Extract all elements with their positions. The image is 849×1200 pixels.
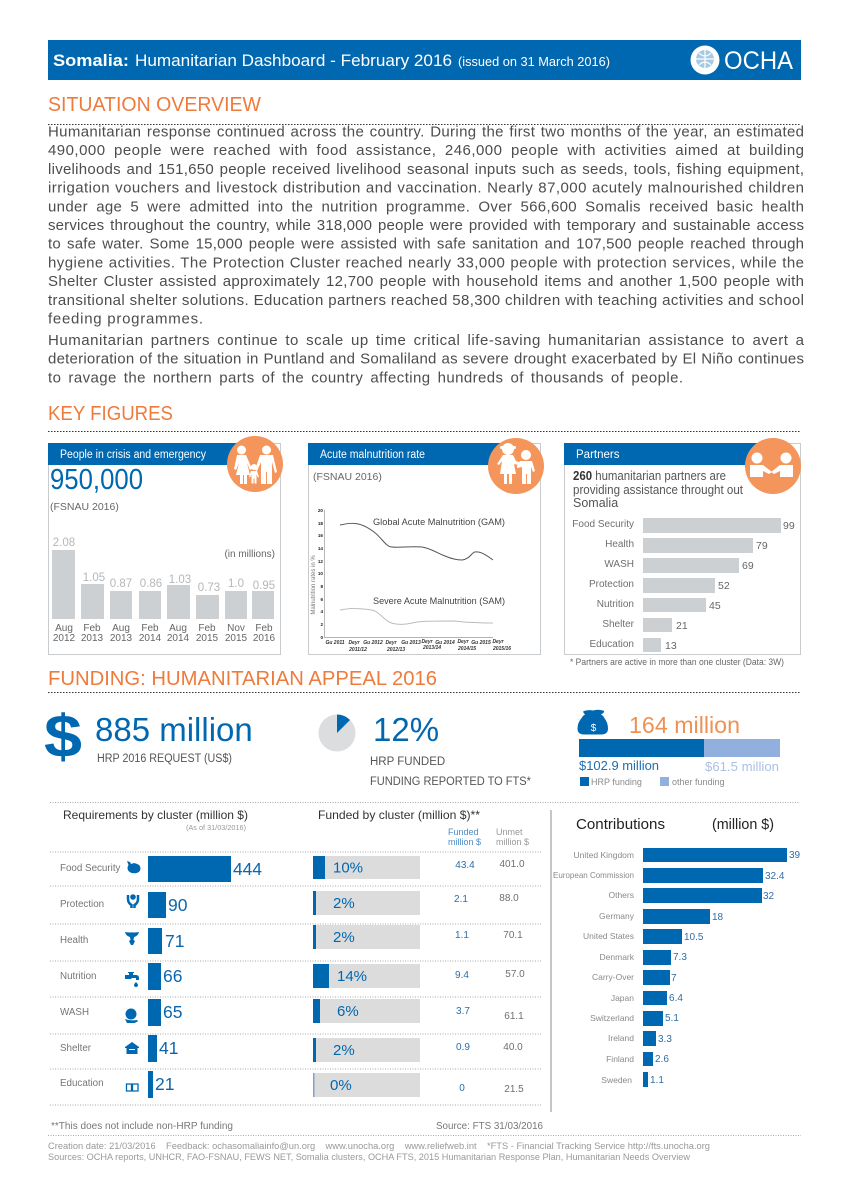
- cluster row: nutrition: Nutrition: [60, 971, 96, 982]
- header banner: [48, 40, 801, 80]
- bar chart: people in crisis: Aug: [112, 623, 130, 634]
- text block: situation overview: Humanitarian response continued across the country. During the first two months of the year, an estimated: [48, 124, 804, 140]
- bar chart: partners by cluster: 13: [665, 640, 677, 652]
- text block: situation overview: under age 5 were admitted into the nutrition programme. Over 566,600 Somalis received basic health: [48, 198, 804, 215]
- icon: dollar sign: $: [44, 703, 82, 770]
- panel: people in crisis and emergency: [48, 436, 283, 654]
- line chart: malnutrition: 12: [318, 559, 323, 564]
- icon: education book: [126, 1084, 138, 1091]
- line chart: malnutrition: 2012/13: [386, 647, 405, 653]
- line chart: malnutrition: 0: [320, 635, 323, 640]
- bar chart: people in crisis: Nov: [227, 623, 245, 634]
- legend: funding: other funding: [672, 777, 725, 787]
- bar chart: people in crisis: 2013: [110, 633, 133, 644]
- text block: situation overview: to ravage the northern parts of the country affecting hundreds of thousands of people.: [48, 369, 683, 386]
- panel: partners: Partners: [576, 449, 620, 461]
- column heading: funded: [448, 827, 481, 847]
- text block: situation overview: services throughout the country, while 318,000 people were provided with temporary and sustainable access: [48, 217, 804, 234]
- bar chart: people in crisis: 0.87: [110, 578, 132, 590]
- header banner: Humanitarian Dashboard - February 2016: [135, 52, 452, 70]
- header banner: (issued on 31 March 2016): [458, 55, 610, 69]
- column heading: funded: Funded: [448, 827, 479, 837]
- note: unit: (in millions): [224, 549, 275, 560]
- cluster row: protection: [60, 891, 519, 918]
- footer text: Creation date: 21/03/2016 Feedback: ochasomaliainfo@un.org www.unocha.org www.reliefweb.int *FTS - Financial Tracking Service http://fts.unocha.org: [48, 1141, 710, 1152]
- cluster row: shelter: 41: [159, 1038, 178, 1058]
- bar chart: contributions: 10.5: [684, 932, 704, 943]
- line chart: malnutrition: Deyr: [492, 639, 505, 645]
- cluster row: education: 0%: [330, 1077, 352, 1094]
- bar chart: people in crisis: 2016: [253, 633, 276, 644]
- bar chart: people in crisis: 2015: [196, 633, 219, 644]
- bar chart: contributions: Carry-Over: [592, 972, 634, 982]
- bar chart: contributions: Germany: [599, 911, 635, 921]
- line chart: malnutrition: Deyr: [348, 640, 361, 646]
- key figure: request: HRP 2016 REQUEST (US$): [97, 753, 232, 765]
- line chart: malnutrition: 2013/14: [422, 645, 441, 651]
- bar chart: contributions: Finland: [606, 1054, 634, 1064]
- cluster row: wash: [60, 999, 524, 1026]
- heading: requirements: [63, 808, 248, 832]
- bar chart: contributions: Japan: [611, 993, 634, 1003]
- cluster row: food security: 43.4: [455, 860, 475, 871]
- bar chart: partners by cluster: 45: [709, 600, 721, 612]
- cluster row: nutrition: 14%: [337, 968, 367, 985]
- line chart: malnutrition: 20: [318, 508, 323, 513]
- icon: health: [125, 932, 139, 945]
- bar chart: partners by cluster: Health: [605, 539, 634, 550]
- cluster row: education: 0: [459, 1083, 465, 1094]
- cluster row: food security: 444: [233, 859, 262, 879]
- line chart: malnutrition: Gu 2015: [471, 640, 491, 646]
- icon: nutrition tap: [125, 972, 139, 987]
- key number: 950,000: [50, 464, 143, 496]
- panel: acute malnutrition rate: Acute malnutrition rate: [320, 449, 425, 461]
- line chart: malnutrition: 6: [320, 597, 323, 602]
- bar chart: contributions: Sweden: [601, 1075, 632, 1085]
- bar chart: partners by cluster: Shelter: [602, 619, 635, 630]
- text block: situation overview: deterioration of the situation in Puntland and Somaliland as severe drought exacerbated by El Niño continues: [48, 351, 804, 368]
- text: partners summary: Somalia: [573, 496, 618, 510]
- cluster row: protection: 2%: [333, 895, 355, 912]
- line chart: malnutrition: Deyr: [385, 640, 398, 646]
- line chart: malnutrition: Deyr: [457, 639, 470, 645]
- cluster row: shelter: 2%: [333, 1042, 355, 1059]
- footnote: partners: * Partners are active in more than one cluster (Data: 3W): [570, 657, 784, 667]
- cluster row: health: 1.1: [455, 930, 469, 941]
- bar chart: contributions: 32: [763, 891, 775, 902]
- key figure: total funding: 164 million: [629, 712, 740, 738]
- line chart: malnutrition: Gu 2014: [435, 640, 455, 646]
- line chart: malnutrition: 18: [318, 521, 323, 526]
- cluster row: food security: 10%: [333, 860, 363, 876]
- bar chart: contributions: United States: [583, 931, 634, 941]
- panel: acute malnutrition rate: [308, 438, 544, 654]
- line chart: malnutrition: Malnutrition rates in %: [311, 555, 317, 615]
- cluster row: wash: 61.1: [504, 1011, 524, 1022]
- line chart: malnutrition: Deyr: [421, 639, 434, 645]
- cluster row: food security: Food Security: [60, 863, 121, 874]
- heading: key figures: KEY FIGURES: [48, 403, 173, 425]
- bar chart: partners by cluster: 79: [756, 540, 768, 552]
- bar chart: partners by cluster: Nutrition: [597, 599, 634, 610]
- divider: vertical: [550, 810, 552, 1112]
- bar chart: people in crisis: 0.86: [140, 578, 162, 590]
- bar chart: contributions: [553, 848, 801, 1087]
- line chart: malnutrition: 2011/12: [348, 647, 367, 653]
- line chart: malnutrition: 4: [320, 609, 323, 614]
- icon: money bag: [578, 710, 608, 734]
- line chart: malnutrition: Global Acute Malnutrition (GAM): [373, 517, 505, 528]
- bar chart: contributions: 32.4: [765, 871, 785, 882]
- text: partners summary: providing assistance throught out: [573, 483, 743, 497]
- pie chart: funded share: [318, 714, 356, 752]
- bar chart: people in crisis: Feb: [141, 623, 159, 634]
- line chart: malnutrition: [311, 508, 511, 653]
- key figure: request: [95, 711, 253, 765]
- bar chart: people in crisis: Aug: [169, 623, 187, 634]
- bar chart: contributions: 3.3: [658, 1034, 672, 1045]
- footer text: [48, 1141, 710, 1163]
- heading: requirements: Requirements by cluster (million $): [63, 808, 248, 822]
- header banner: Somalia:: [53, 51, 129, 70]
- heading: contributions: [576, 817, 774, 833]
- bar chart: contributions: 1.1: [650, 1075, 664, 1086]
- heading: requirements: (As of 31/03/2016): [186, 825, 246, 832]
- bar chart: people in crisis: Feb: [83, 623, 101, 634]
- bar chart: contributions: 2.6: [655, 1054, 669, 1065]
- bar chart: people in crisis: 0.73: [198, 582, 220, 594]
- icon: UN emblem: [690, 46, 720, 74]
- cluster row: shelter: Shelter: [60, 1043, 92, 1054]
- bar chart: people in crisis: 2014: [167, 633, 190, 644]
- cluster row: nutrition: 9.4: [455, 970, 469, 981]
- cluster row: shelter: [60, 1035, 523, 1062]
- source: (FSNAU 2016): [313, 471, 382, 483]
- stacked bar: funding split: $61.5 million: [705, 759, 779, 774]
- text block: situation overview: to safe water. Some 15,000 people were assisted with safe sanitation and 107,500 people reached through: [48, 236, 804, 253]
- legend: funding: [580, 777, 725, 787]
- bar chart: partners by cluster: [572, 518, 795, 652]
- cluster row: shelter: 40.0: [503, 1042, 523, 1053]
- heading: contributions: (million $): [712, 817, 774, 833]
- bar chart: partners by cluster: 21: [676, 620, 688, 632]
- text block: situation overview: transitional shelter solutions. Education partners reached 58,300 children with teaching activities and school: [48, 292, 804, 309]
- bar chart: partners by cluster: 69: [742, 560, 754, 572]
- column heading: unmet: Unmet: [496, 827, 523, 837]
- cluster row: food security: [60, 856, 525, 882]
- bar chart: contributions: United Kingdom: [574, 850, 634, 860]
- line chart: malnutrition: 10: [318, 571, 323, 576]
- bar chart: people in crisis: Aug: [55, 623, 73, 634]
- cluster row: health: Health: [60, 935, 88, 946]
- bar chart: people in crisis: Feb: [255, 623, 273, 634]
- panel: people in crisis and emergency: People in crisis and emergency: [60, 449, 206, 461]
- legend: funding: HRP funding: [591, 777, 642, 787]
- text block: situation overview: hygiene activities. The Protection Cluster reached nearly 33,000 people with protection services, while the: [48, 254, 804, 271]
- key figure: funded: [370, 711, 531, 788]
- cluster row: wash: 6%: [337, 1003, 359, 1020]
- cluster row: health: 70.1: [503, 930, 523, 941]
- cluster row: health: [60, 925, 523, 954]
- cluster row: nutrition: 66: [163, 966, 182, 986]
- panel: partners: [564, 438, 801, 654]
- cluster row: wash: WASH: [60, 1007, 89, 1018]
- bar chart: people in crisis: Feb: [198, 623, 216, 634]
- bar chart: people in crisis: [52, 537, 276, 644]
- column heading: funded: million $: [448, 837, 481, 847]
- bar chart: partners by cluster: WASH: [604, 559, 634, 570]
- bar chart: partners by cluster: Protection: [589, 579, 634, 590]
- cluster row: health: 2%: [333, 929, 355, 946]
- cluster row: education: Education: [60, 1078, 104, 1089]
- icon: money bag: $: [591, 723, 597, 734]
- cluster row: protection: 2.1: [454, 894, 468, 905]
- bar chart: contributions: 6.4: [669, 993, 683, 1004]
- cluster row: protection: Protection: [60, 899, 104, 910]
- bar chart: contributions: Switzerland: [590, 1013, 634, 1023]
- bar chart: people in crisis: 2014: [139, 633, 162, 644]
- line chart: malnutrition: Severe Acute Malnutrition (SAM): [373, 596, 505, 607]
- bar chart: partners by cluster: Education: [590, 639, 634, 650]
- icon: wash: [125, 1008, 138, 1023]
- text block: situation overview: 490,000 people were reached with food assistance, 246,000 people with activities aimed at building: [48, 142, 804, 159]
- icon: handshake: [745, 438, 801, 494]
- icon: food: [127, 861, 140, 873]
- line chart: malnutrition: 14: [318, 546, 323, 551]
- key figure: funded: FUNDING REPORTED TO FTS*: [370, 776, 531, 788]
- line chart: malnutrition: Gu 2013: [401, 640, 421, 646]
- bar chart: contributions: 7: [671, 973, 677, 984]
- bar chart: people in crisis: 2015: [225, 633, 248, 644]
- stacked bar: funding split: [579, 739, 780, 774]
- icon: children: [488, 438, 544, 494]
- text block: situation overview: livelihoods and 151,650 people received livelihood seasonal inputs such as seeds, tools, fishing equipment,: [48, 161, 804, 178]
- line chart: malnutrition: 8: [320, 584, 323, 589]
- bar chart: partners by cluster: 52: [718, 580, 730, 592]
- bar chart: people in crisis: 2012: [53, 633, 76, 644]
- cluster row: education: 21.5: [504, 1084, 524, 1095]
- bar chart: contributions: European Commission: [553, 870, 634, 880]
- bar chart: partners by cluster: 99: [783, 520, 795, 532]
- bar chart: partners by cluster: Food Security: [572, 519, 634, 530]
- bar chart: contributions: Denmark: [600, 952, 635, 962]
- line chart: malnutrition: 16: [318, 533, 323, 538]
- bar chart: people in crisis: 1.0: [228, 578, 244, 590]
- bar chart: people in crisis: 2013: [81, 633, 104, 644]
- icon: family: [227, 436, 283, 492]
- icon: shelter: [125, 1042, 139, 1054]
- key figure: request: 885 million: [95, 711, 253, 748]
- icon: protection: [128, 894, 138, 908]
- bar chart: people in crisis: 2.08: [53, 537, 75, 549]
- text: partners summary: [573, 469, 743, 510]
- stacked bar: funding split: $102.9 million: [579, 758, 659, 773]
- heading: funded: Funded by cluster (million $)**: [318, 808, 480, 822]
- footer text: Sources: OCHA reports, UNHCR, FAO-FSNAU, FEWS NET, Somalia clusters, OCHA FTS, 2015 Humanitarian Response Plan, Humanitarian Needs Overview: [48, 1152, 690, 1163]
- text block: situation overview: feeding programmes.: [48, 310, 203, 328]
- bar chart: contributions: 7.3: [673, 952, 687, 963]
- bar chart: contributions: 39: [789, 850, 801, 861]
- source: (FSNAU 2016): [50, 501, 119, 513]
- text: partners summary: 260 humanitarian partners are: [573, 469, 726, 483]
- source: FTS: Source: FTS 31/03/2016: [436, 1121, 543, 1132]
- cluster row: shelter: 0.9: [456, 1042, 470, 1053]
- heading: contributions: Contributions: [576, 817, 665, 833]
- bar chart: contributions: 5.1: [665, 1013, 679, 1024]
- footnote: non-HRP funding: **This does not include non-HRP funding: [51, 1121, 233, 1132]
- cluster row: food security: 401.0: [499, 859, 525, 870]
- column heading: unmet: [496, 827, 529, 847]
- bar chart: contributions: 18: [712, 912, 724, 923]
- bar chart: people in crisis: 1.03: [169, 574, 191, 586]
- text block: situation overview: Humanitarian partners continue to scale up time critical life-saving humanitarian assistance to avert a: [48, 332, 805, 349]
- cluster row: nutrition: 57.0: [505, 969, 525, 980]
- key figure: funded: HRP FUNDED: [370, 756, 445, 768]
- header banner: OCHA: [724, 47, 793, 75]
- cluster row: education: [60, 1071, 524, 1098]
- line chart: malnutrition: 2015/16: [492, 646, 511, 652]
- text block: situation overview: [48, 124, 805, 386]
- cluster row: protection: 88.0: [499, 893, 519, 904]
- heading: funding: FUNDING: HUMANITARIAN APPEAL 2016: [48, 668, 437, 690]
- line chart: malnutrition: 2014/15: [457, 646, 476, 652]
- bar chart: people in crisis: 1.05: [83, 572, 105, 584]
- cluster row: wash: 3.7: [456, 1006, 470, 1017]
- bar chart: people in crisis: 0.95: [253, 580, 275, 592]
- bar chart: contributions: Others: [608, 890, 634, 900]
- cluster row: protection: 90: [168, 895, 188, 915]
- line chart: malnutrition: Gu 2011: [325, 640, 345, 646]
- panel: contributions: [553, 817, 801, 1087]
- column heading: unmet: million $: [496, 837, 529, 847]
- cluster row: education: 21: [155, 1074, 174, 1094]
- cluster row: wash: 65: [163, 1002, 182, 1022]
- line chart: malnutrition: 2: [320, 622, 323, 627]
- text block: situation overview: Shelter Cluster assisted approximately 12,700 people with household items and another 1,500 people with: [48, 273, 804, 290]
- cluster row: health: 71: [165, 931, 184, 951]
- cluster row: nutrition: [60, 963, 525, 990]
- bar chart: contributions: Ireland: [608, 1033, 634, 1043]
- heading: situation overview: SITUATION OVERVIEW: [48, 94, 261, 116]
- text block: situation overview: irrigation vouchers and livestock distribution and vaccination. Nearly 87,000 acutely malnourished children: [48, 180, 804, 197]
- line chart: malnutrition: Gu 2012: [363, 640, 383, 646]
- key figure: funded: 12%: [373, 711, 439, 748]
